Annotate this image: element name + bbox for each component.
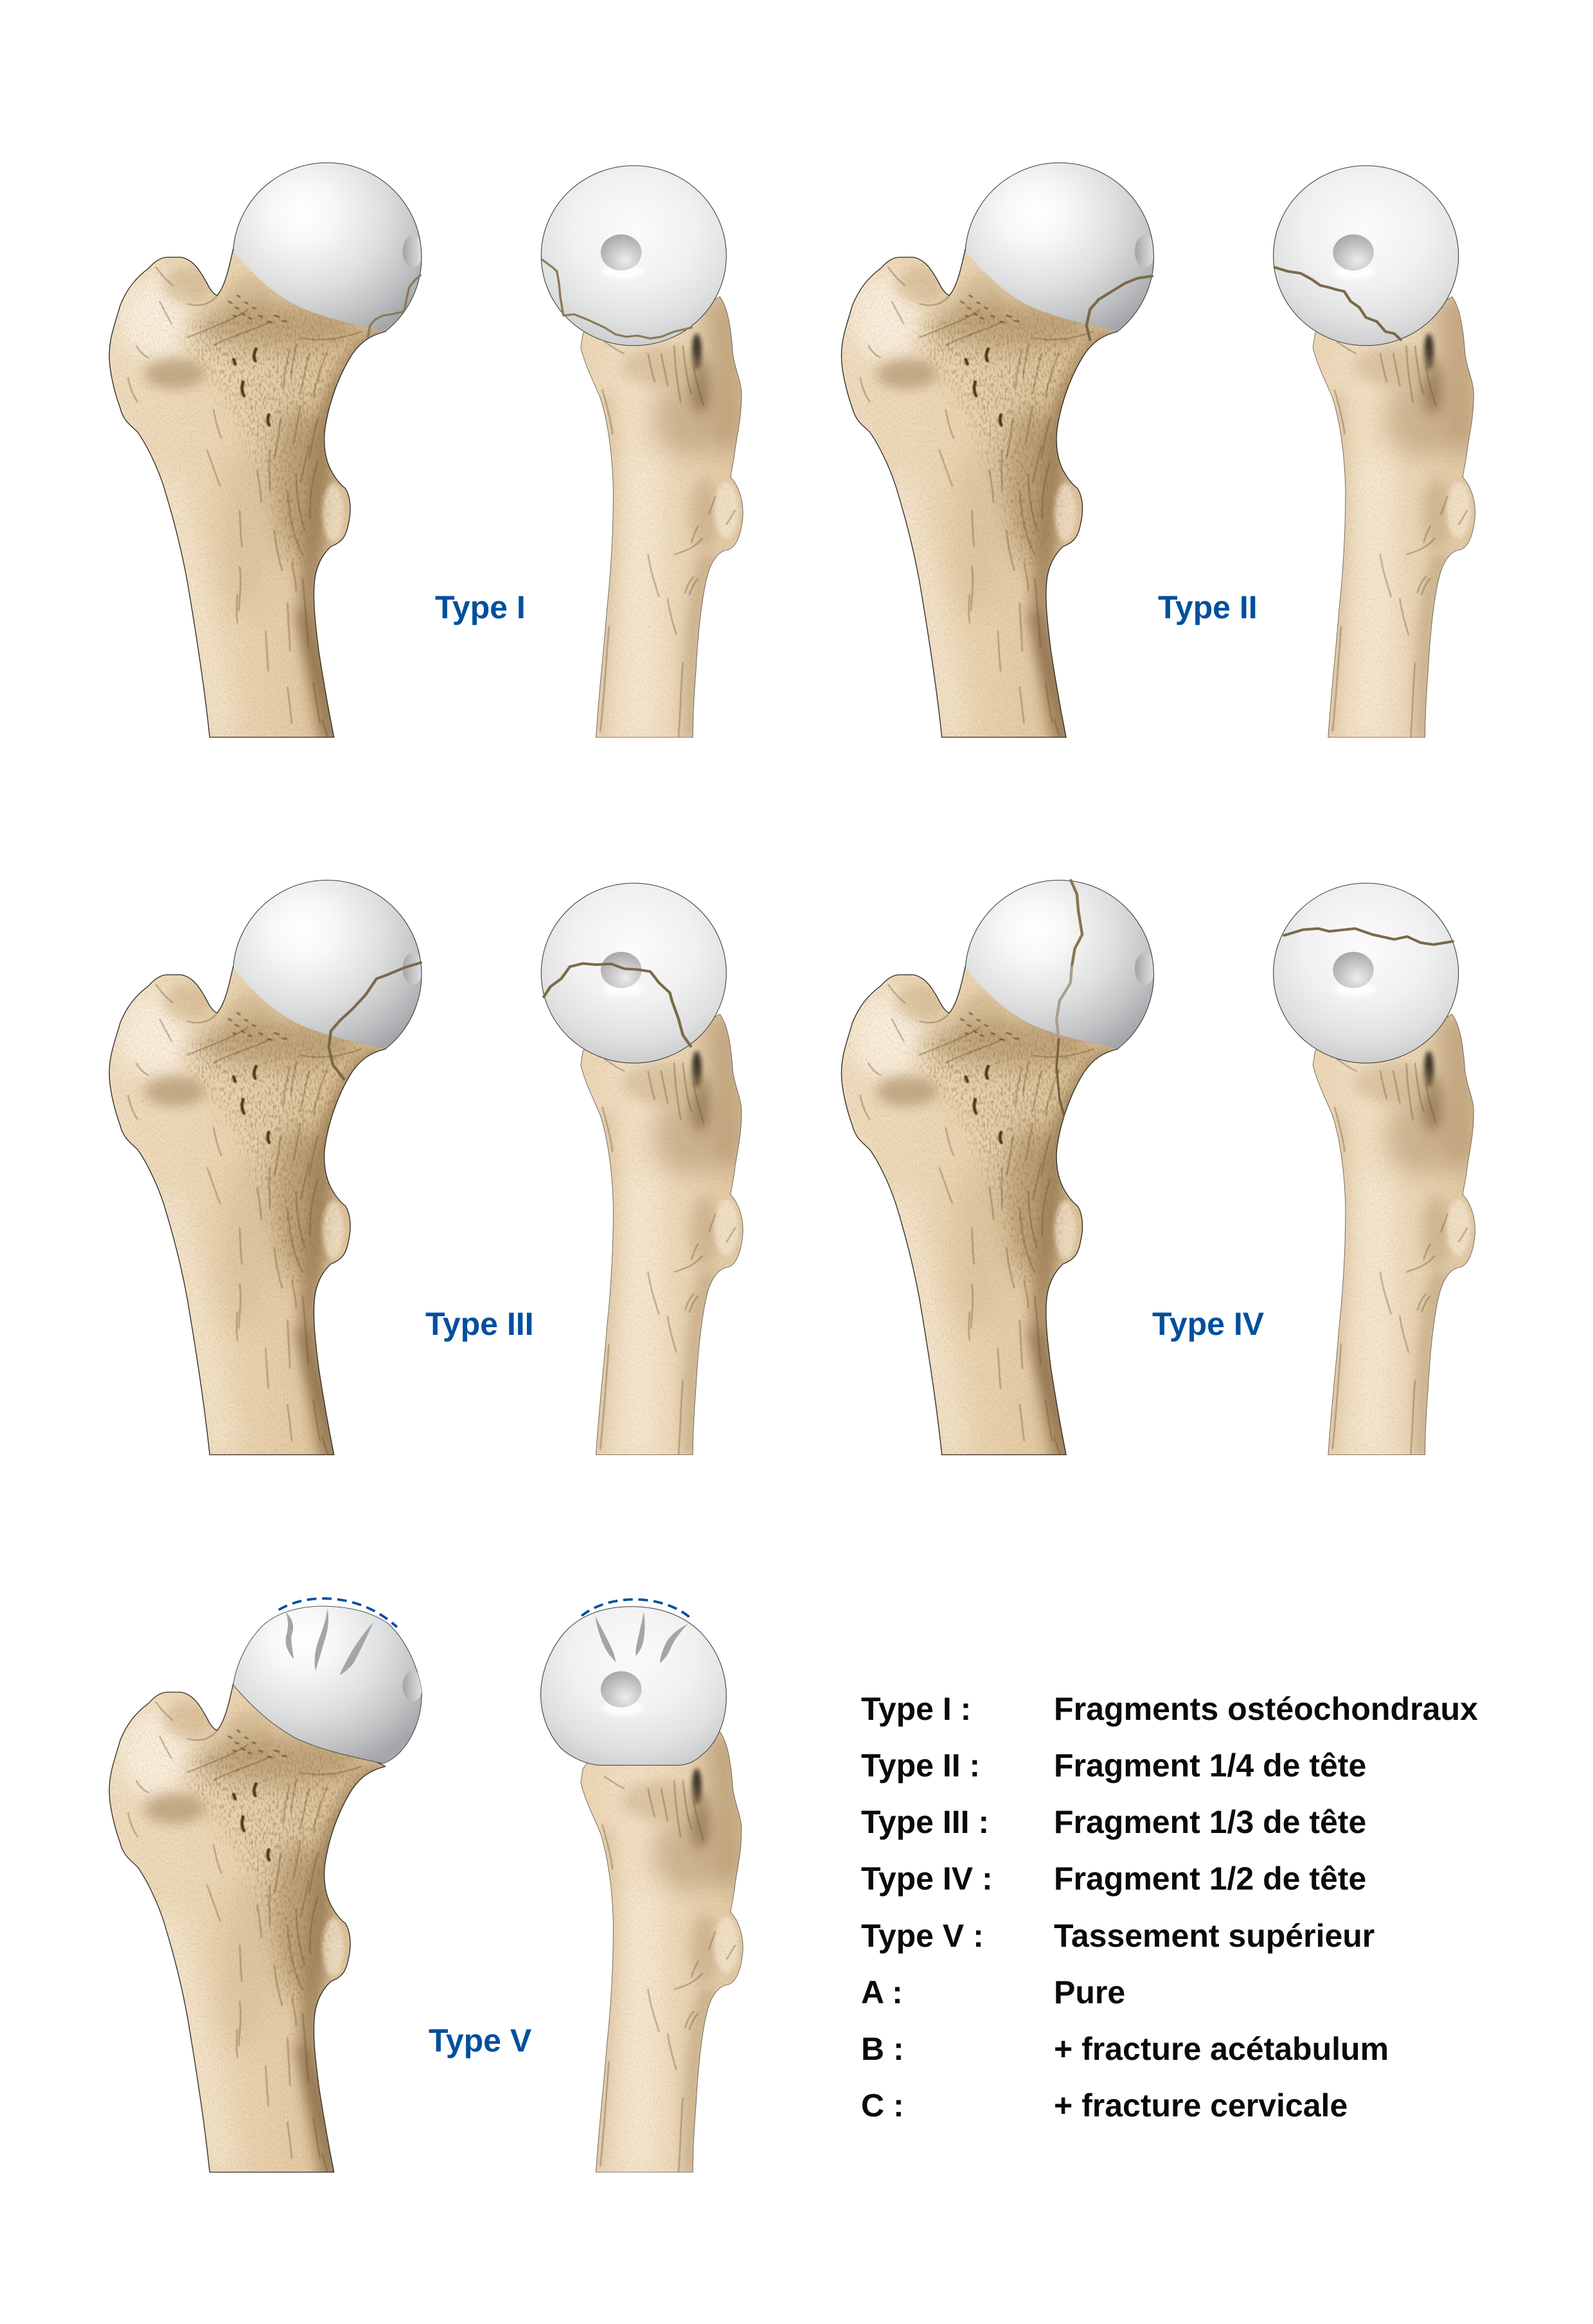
- legend row: A: Pure: [1054, 1974, 1125, 2010]
- label: Type V: Type V: [429, 2023, 532, 2059]
- femur front view: [833, 249, 1117, 747]
- legend row: Type IV: [861, 1861, 1366, 1897]
- label: Type I: Type I: [435, 589, 526, 625]
- panel: Type V: [101, 1598, 748, 2182]
- legend row: C: C :: [861, 2087, 904, 2123]
- fracture line front: [1071, 880, 1082, 967]
- fracture line front: [329, 963, 421, 1079]
- legend row: Type V: Type V :: [861, 1918, 984, 1954]
- femur back view: [1306, 1011, 1480, 1457]
- femoral head front view: [233, 880, 423, 1049]
- femur pair: Type I: [101, 163, 748, 747]
- legend row: Type III: [861, 1804, 1366, 1840]
- compression cracks front: [286, 1609, 373, 1676]
- femoral head front view: [965, 163, 1155, 332]
- flattened femoral head back view: [541, 1607, 726, 1765]
- legend row: Type II: Fragment 1/4 de tête: [1054, 1747, 1366, 1783]
- femoral head back view: [541, 883, 726, 1063]
- compression cracks back: [595, 1612, 688, 1663]
- legend row: Type II: Type II :: [861, 1747, 980, 1783]
- legend row: Type I: Type I :: [861, 1691, 971, 1727]
- femoral head back view: [541, 166, 726, 346]
- panel: Type III: [101, 880, 748, 1465]
- legend row: Type V: Tassement supérieur: [1054, 1918, 1375, 1954]
- femur back view: [574, 294, 748, 739]
- flattened femoral head front view: [233, 1606, 423, 1764]
- femur front view: [833, 967, 1117, 1465]
- fracture line front: [1087, 276, 1152, 339]
- fracture line back: [1285, 929, 1453, 945]
- fracture line front: [368, 275, 420, 337]
- legend row: Type I: [861, 1691, 1478, 1727]
- femur pair: Type III: [101, 880, 748, 1465]
- label: Type III: Type III: [425, 1306, 534, 1342]
- femur pair: Type V: [101, 1598, 748, 2182]
- fracture line back: [544, 963, 691, 1046]
- legend row: C: [861, 2087, 1348, 2123]
- label: Type II: Type II: [1158, 589, 1258, 625]
- legend row: Type III: Fragment 1/3 de tête: [1054, 1804, 1366, 1840]
- legend row: Type V: [861, 1918, 1375, 1954]
- panel: Type I: [101, 163, 748, 747]
- dashed outline of original head front: [279, 1598, 397, 1627]
- legend row: Type IV: Fragment 1/2 de tête: [1054, 1861, 1366, 1897]
- femoral head back view: [1274, 166, 1459, 346]
- femur back view: [1306, 294, 1480, 739]
- femoral head front view: [965, 880, 1155, 1049]
- label: Type IV: Type IV: [1152, 1306, 1265, 1342]
- femur front view: [101, 967, 385, 1465]
- femoral head back view: [1274, 883, 1459, 1063]
- femoral head front view: [233, 163, 423, 332]
- dashed outline of original head back: [582, 1600, 690, 1617]
- femur back view: [574, 1011, 748, 1457]
- legend row: Type III: Type III :: [861, 1804, 989, 1840]
- legend: [861, 1691, 1478, 2123]
- femur pair: Type II: [833, 163, 1480, 747]
- legend row: C: + fracture cervicale: [1054, 2087, 1348, 2123]
- panel: Type IV: [833, 880, 1480, 1465]
- fracture line back: [1275, 267, 1401, 339]
- legend row: B: + fracture acétabulum: [1054, 2031, 1389, 2067]
- legend row: B: [861, 2031, 1389, 2067]
- legend row: A: A :: [861, 1974, 903, 2010]
- femur pair: Type IV: [833, 880, 1480, 1465]
- legend row: Type I: Fragments ostéochondraux: [1054, 1691, 1478, 1727]
- femur front view: [101, 249, 385, 747]
- legend row: Type II: [861, 1747, 1366, 1783]
- femur front view: [101, 1684, 385, 2182]
- legend row: B: B :: [861, 2031, 904, 2067]
- femur back view: [574, 1728, 748, 2174]
- panel: Type II: [833, 163, 1480, 747]
- legend row: Type IV: Type IV :: [861, 1861, 993, 1897]
- fracture line back: [542, 259, 691, 339]
- legend row: A: [861, 1974, 1125, 2010]
